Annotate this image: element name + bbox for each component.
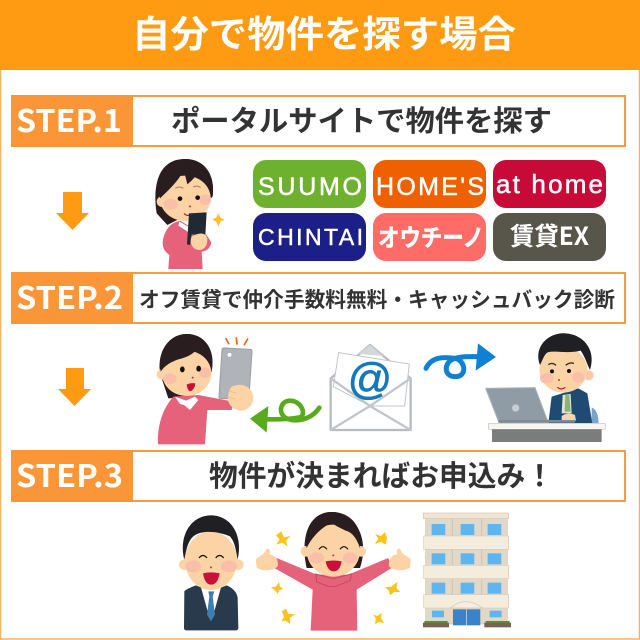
step 2 heading: STEP.2 [16, 273, 123, 318]
step 2 heading: オフ賃貸で仲介手数料無料・キャッシュバック診断 [139, 284, 615, 314]
arrow: step 2 to step 3 [58, 368, 91, 406]
button: オウチーノ: オウチーノ [378, 218, 484, 253]
button: SUUMO: SUUMO [258, 173, 362, 201]
step 3 heading: 物件が決まればお申込み！ [209, 453, 554, 495]
step 3 heading [11, 450, 625, 502]
button: CHINTAI [253, 213, 366, 261]
illustration: woman looking at smartphone [155, 159, 225, 269]
button: CHINTAI: CHINTAI [258, 224, 363, 250]
illustration: agent with laptop at desk [486, 333, 605, 442]
button: at home: at home [496, 169, 603, 199]
button: 賃貸EX [493, 213, 606, 261]
portal site buttons [253, 160, 606, 261]
title banner [0, 0, 640, 70]
step 1 heading: STEP.1 [16, 96, 122, 141]
icon: envelope with @ mail [331, 345, 411, 430]
button: オウチーノ [373, 213, 486, 261]
step 3 heading: STEP.3 [16, 451, 123, 496]
icon: envelope with @ mail: @ [348, 354, 392, 403]
title banner: 自分で物件を探す場合 [132, 4, 516, 58]
illustration: cheering woman with sparkles [256, 512, 411, 631]
step 2 heading [11, 272, 625, 324]
arrow: step 1 to step 2 [56, 192, 89, 230]
arrow: green, mail to woman [250, 401, 319, 433]
illustration: apartment building [423, 513, 511, 627]
illustration: woman holding up smartphone [157, 334, 253, 444]
button: at home [493, 160, 606, 208]
button: HOME'S: HOME'S [376, 173, 484, 201]
button: 賃貸EX: 賃貸EX [510, 217, 589, 253]
illustration: smiling agent in suit [179, 515, 244, 630]
button: SUUMO [253, 160, 366, 208]
button: HOME'S [373, 160, 486, 208]
step 1 heading: ポータルサイトで物件を探す [171, 98, 552, 140]
arrow: blue, mail to agent [426, 343, 496, 377]
step 1 heading [11, 95, 625, 147]
